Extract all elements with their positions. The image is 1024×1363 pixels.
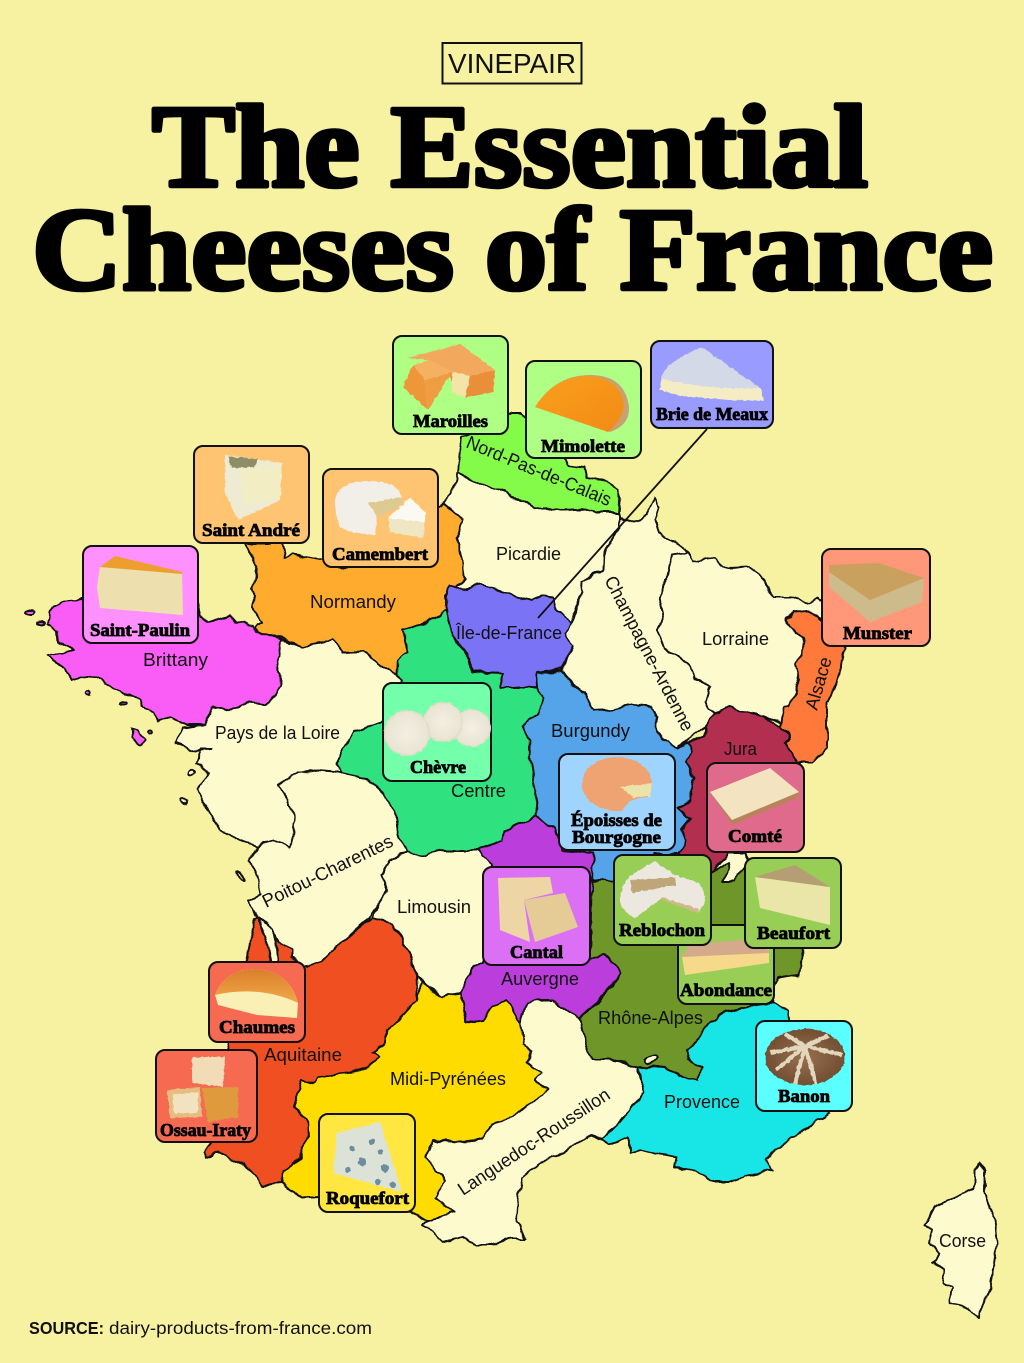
region labels: Lorraine — [702, 628, 769, 649]
region: Poitou-Charentes — [247, 770, 407, 967]
card: Chèvre — [383, 683, 491, 781]
cheese: Comté — [710, 768, 799, 825]
card: Abondance: Abondance — [680, 980, 772, 1000]
source line: dairy-products-from-france.com — [109, 1318, 372, 1338]
card: Brie de Meaux: Brie de Meaux — [656, 404, 768, 424]
card: Saint André: Saint André — [202, 520, 300, 540]
region: Brittany — [47, 598, 280, 725]
card: Roquefort — [319, 1114, 415, 1212]
region: Île-de-France — [445, 585, 572, 688]
region: Normandy — [245, 503, 465, 675]
cheese: Camembert — [335, 481, 426, 538]
region: Champagne-Ardenne — [562, 498, 715, 748]
region: Geneva gap — [712, 853, 760, 895]
card: Époisses de Bourgogne: Époisses de — [571, 809, 662, 830]
region labels: Jura — [724, 738, 758, 759]
region labels: Auvergne — [501, 968, 579, 989]
cheese: Munster — [829, 563, 924, 622]
region labels: Île-de-France — [455, 622, 562, 643]
card: Mimolette: Mimolette — [541, 436, 625, 456]
region labels: Nord-Pas-de-Calais — [463, 431, 615, 510]
cheese: Abondance — [682, 940, 769, 975]
cheese: Saint-Paulin — [97, 556, 183, 615]
region: Alsace — [780, 610, 845, 762]
region labels — [143, 431, 986, 1251]
cheese: Chaumes — [215, 969, 298, 1018]
card: Chaumes: Chaumes — [219, 1017, 295, 1037]
region: Picardie — [443, 473, 619, 623]
card: Munster: Munster — [843, 623, 912, 643]
cheese: Chèvre — [384, 702, 491, 756]
cheese: Ossau-Iraty — [167, 1057, 238, 1122]
region: Jura — [677, 707, 800, 873]
region: Centre — [335, 610, 544, 855]
card: Roquefort: Roquefort — [326, 1188, 409, 1208]
leader line: Brie de Meaux to Île-de-France — [538, 429, 707, 618]
region: Midi-Pyrénées — [282, 982, 547, 1220]
region: Languedoc-Roussillon — [423, 1000, 645, 1245]
region labels: Alsace — [801, 654, 836, 712]
cheese: Cantal — [498, 877, 578, 942]
card: Reblochon: Reblochon — [619, 920, 705, 940]
region: Provence — [602, 1003, 829, 1182]
title: The Essential — [152, 81, 868, 212]
cheese: Mimolette — [535, 375, 629, 432]
region labels: Midi-Pyrénées — [390, 1068, 506, 1089]
region labels: Brittany — [143, 649, 209, 670]
card: Ossau-Iraty — [156, 1050, 257, 1142]
region labels: Champagne-Ardenne — [600, 572, 698, 734]
islands: Atlantic — [179, 770, 247, 881]
card: Saint-Paulin — [83, 546, 198, 643]
card: Époisses de Bourgogne — [559, 754, 675, 850]
card: Maroilles: Maroilles — [413, 411, 488, 431]
region: Aquitaine — [205, 917, 418, 1185]
region labels: Normandy — [310, 591, 397, 612]
cheese: Reblochon — [620, 861, 705, 918]
card: Abondance — [678, 925, 774, 1004]
region: Auvergne — [460, 817, 622, 1023]
region labels: Languedoc-Roussillon — [454, 1084, 614, 1199]
region labels: Burgundy — [551, 720, 631, 741]
card: Banon — [756, 1021, 852, 1111]
region labels: Pays de la Loire — [215, 722, 340, 743]
card: Cantal: Cantal — [510, 942, 563, 962]
cheese: Maroilles — [403, 344, 495, 410]
card: Comté: Comté — [728, 826, 782, 846]
card: Chaumes — [209, 962, 305, 1042]
cheese: Saint André — [225, 455, 282, 520]
region: Burgundy — [522, 670, 692, 882]
card: Saint André — [194, 446, 309, 543]
region labels: Provence — [664, 1091, 740, 1112]
card: Cantal — [483, 867, 590, 965]
logo: VinePair: VINEPAIR — [448, 48, 576, 79]
card: Munster — [822, 549, 930, 646]
region: Corse — [925, 1162, 997, 1317]
title: Cheeses of France — [32, 184, 993, 315]
card: Camembert — [323, 469, 438, 567]
cheese: Époisses — [582, 757, 652, 812]
card: Reblochon — [614, 855, 711, 945]
card: Camembert: Camembert — [332, 544, 428, 564]
card: Banon: Banon — [778, 1086, 830, 1106]
region: Limousin — [373, 850, 490, 997]
source line: SOURCE: — [29, 1318, 104, 1338]
cheese: Roquefort — [333, 1122, 402, 1192]
region: Lorraine — [657, 552, 826, 723]
card: Chèvre: Chèvre — [410, 757, 466, 777]
card: Beaufort — [745, 858, 841, 948]
region labels: Poitou-Charentes — [259, 830, 396, 912]
region: Rhône-Alpes — [580, 853, 802, 1080]
region: Nord-Pas-de-Calais — [458, 413, 620, 513]
title — [32, 81, 993, 315]
cheese: Brie de Meaux — [660, 347, 764, 401]
card: Maroilles — [393, 336, 508, 434]
region labels: Rhône-Alpes — [598, 1007, 703, 1028]
card: Mimolette — [526, 361, 641, 458]
card: Brie de Meaux — [651, 341, 773, 428]
card: Ossau-Iraty: Ossau-Iraty — [160, 1120, 251, 1140]
card: Comté — [707, 763, 804, 852]
card: Époisses de Bourgogne: Bourgogne — [572, 827, 661, 847]
lake — [643, 1053, 659, 1065]
region labels: Aquitaine — [264, 1044, 342, 1065]
region labels: Corse — [939, 1230, 986, 1251]
region: Pays de la Loire — [177, 640, 403, 847]
card: Saint-Paulin: Saint-Paulin — [90, 620, 190, 640]
region labels: Limousin — [397, 896, 471, 917]
cheese: Beaufort — [755, 865, 830, 925]
islands: Brittany — [26, 611, 153, 745]
region labels: Centre — [451, 780, 506, 801]
map of France regions — [26, 413, 997, 1317]
region labels: Picardie — [496, 543, 561, 564]
cheese: Banon — [765, 1029, 845, 1085]
card: Beaufort: Beaufort — [757, 923, 830, 943]
estuary: Gironde — [258, 917, 278, 965]
